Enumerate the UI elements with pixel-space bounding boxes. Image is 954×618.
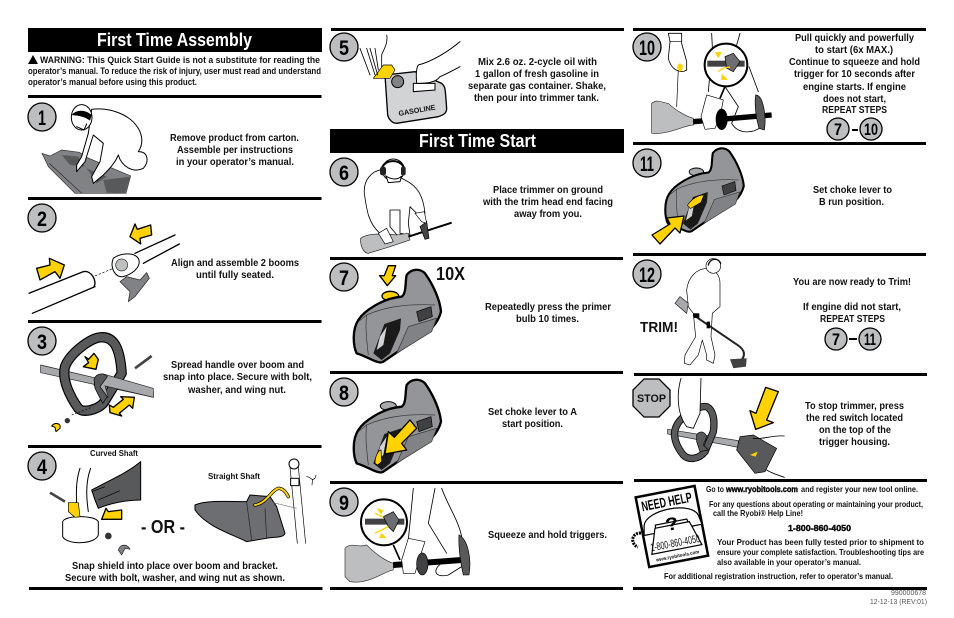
step 10 text bbox=[789, 33, 920, 116]
step 4 number: 4 bbox=[37, 456, 47, 479]
step 1 text: in your operator’s manual. bbox=[176, 157, 294, 168]
step 12 text bbox=[793, 277, 911, 325]
heading: first time assembly: First Time Assembly bbox=[97, 30, 252, 50]
step 10 number: 10 bbox=[639, 37, 655, 60]
arrow: press primer bbox=[380, 266, 396, 286]
help text block bbox=[664, 484, 924, 581]
panel: first time start column bbox=[330, 28, 624, 590]
icon: curved shaft shield bbox=[50, 462, 141, 555]
step 6 number: 6 bbox=[339, 162, 349, 185]
step 11 number: 11 bbox=[640, 153, 654, 176]
icon: phone cord bbox=[633, 533, 641, 547]
help text block: www.ryobitools.com bbox=[725, 484, 798, 494]
step 5 text bbox=[468, 57, 606, 104]
or separator: - OR - bbox=[141, 517, 185, 537]
arrow: choke lever down bbox=[385, 420, 417, 454]
repeat steps 7 to 11 bbox=[825, 328, 881, 350]
icon: stop sign: STOP bbox=[637, 393, 666, 405]
step 10 number bbox=[633, 33, 661, 61]
step 11 text bbox=[813, 185, 892, 208]
step 3 text: snap into place. Secure with bolt, bbox=[163, 372, 312, 383]
icon: need help phone card: www.ryobitools.com bbox=[655, 549, 700, 564]
step 10 text: Continue to squeeze and hold bbox=[789, 57, 920, 68]
step 3 text: Spread handle over boom and bbox=[171, 360, 304, 371]
step 11 text: Set choke lever to bbox=[813, 185, 892, 196]
repeat steps 7 to 10: 10 bbox=[864, 121, 878, 139]
icon: need help phone card: NEED HELP bbox=[640, 489, 693, 514]
step 9 text: Squeeze and hold triggers. bbox=[488, 530, 607, 541]
repeat steps 7 to 10: 7 bbox=[834, 121, 842, 139]
step 8 number bbox=[330, 378, 358, 406]
step 6 number bbox=[330, 158, 358, 186]
step 7 text: bulb 10 times. bbox=[516, 314, 579, 325]
step 12 text: If engine did not start, bbox=[803, 302, 901, 313]
step 4 text: Secure with bolt, washer, and wing nut as shown. bbox=[65, 573, 285, 584]
step 12 text: You are now ready to Trim! bbox=[793, 277, 911, 288]
step 5 text: separate gas container. Shake, bbox=[468, 81, 606, 92]
icon: engine housing primer bulb bbox=[354, 266, 441, 362]
step 5 number bbox=[330, 33, 358, 61]
step 1 number: 1 bbox=[38, 107, 46, 130]
step 12 number: 12 bbox=[639, 264, 655, 287]
warning text: operator’s manual before using this product. bbox=[28, 77, 197, 87]
help text block: 1-800-860-4050 bbox=[788, 523, 851, 533]
arrow: press stop switch bbox=[750, 387, 778, 429]
help text block: also available in your operator’s manual. bbox=[717, 557, 861, 567]
step 2 text bbox=[171, 258, 299, 281]
arrow: snap shield bbox=[102, 508, 122, 519]
repeat steps 7 to 10 bbox=[827, 118, 882, 140]
icon: straight shaft shield bbox=[195, 459, 316, 543]
step 8 text: start position. bbox=[502, 419, 563, 430]
step 7 text bbox=[485, 302, 611, 325]
step 4 text bbox=[65, 561, 285, 584]
document number bbox=[870, 590, 927, 606]
icon: need help phone card bbox=[636, 486, 708, 567]
step 11 number bbox=[633, 149, 661, 177]
label: trim: TRIM! bbox=[640, 319, 678, 336]
step 11 text: B run position. bbox=[819, 197, 884, 208]
heading: first time start: First Time Start bbox=[419, 131, 536, 151]
step 6 text: away from you. bbox=[514, 209, 582, 220]
step stop text bbox=[805, 401, 904, 448]
step 8 text bbox=[488, 407, 577, 430]
document number: 990000678 bbox=[891, 590, 926, 597]
icon: gas container with hand: GASOLINE bbox=[398, 103, 436, 118]
icon: need help phone card: 1-800-860-4050 bbox=[650, 533, 701, 554]
help text block: call the Ryobi® Help Line! bbox=[713, 508, 803, 518]
step 5 text: Mix 2.6 oz. 2-cycle oil with bbox=[478, 57, 597, 68]
help text block: Go to bbox=[706, 484, 724, 494]
icon: engine housing choke run bbox=[665, 148, 744, 232]
step 4 number bbox=[28, 452, 56, 480]
arrow: push boom left bbox=[130, 224, 152, 244]
panel: first time assembly column bbox=[28, 28, 322, 590]
icon: stop switch on trimmer bbox=[668, 378, 784, 477]
step 10 text: does not start, bbox=[823, 94, 886, 105]
help text block: Your Product has been fully tested prior to shipment to bbox=[717, 537, 924, 547]
icon: person trimming bbox=[675, 259, 747, 368]
icon: person unpacking carton bbox=[42, 105, 147, 193]
step 2 number: 2 bbox=[37, 208, 47, 231]
heading: first time start bbox=[330, 129, 624, 153]
panel: start and stop column bbox=[633, 28, 927, 606]
step 10 text: to start (6x MAX.) bbox=[815, 45, 893, 56]
label: straight shaft: Straight Shaft bbox=[208, 471, 260, 481]
arrow: choke lever right bbox=[652, 216, 684, 244]
icon: pull starter bbox=[652, 33, 772, 134]
icon: need help phone card: ? bbox=[664, 513, 680, 535]
step 2 number bbox=[28, 204, 56, 232]
icon: stop sign bbox=[633, 379, 670, 417]
step 3 number: 3 bbox=[37, 331, 47, 354]
step 6 text bbox=[482, 185, 613, 220]
label: 10x: 10X bbox=[436, 264, 465, 284]
step 7 number: 7 bbox=[339, 267, 349, 290]
step 2 text: until fully seated. bbox=[196, 270, 274, 281]
step 5 text: 1 gallon of fresh gasoline in bbox=[475, 69, 599, 80]
step stop text: on the top of the bbox=[819, 425, 891, 436]
icon: person placing trimmer bbox=[361, 159, 452, 253]
arrow: push boom right bbox=[37, 258, 64, 280]
step 7 text: Repeatedly press the primer bbox=[485, 302, 611, 313]
help text block: ensure your complete satisfaction. Troubleshooting tips are bbox=[717, 547, 924, 557]
step stop text: the red switch located bbox=[806, 413, 903, 424]
step 4 text: Snap shield into place over boom and bracket. bbox=[72, 561, 278, 572]
step 10 text: trigger for 10 seconds after bbox=[794, 69, 915, 80]
step 6 text: with the trim head end facing bbox=[482, 197, 613, 208]
step 1 text: Assemble per instructions bbox=[177, 145, 293, 156]
step 1 text bbox=[170, 133, 299, 168]
step 3 text: washer, and wing nut. bbox=[187, 385, 286, 396]
step 7 number bbox=[330, 263, 358, 291]
arrow: double spread bbox=[109, 397, 134, 416]
repeat steps 7 to 11: 7 bbox=[832, 331, 840, 349]
step 5 number: 5 bbox=[339, 37, 349, 60]
step 1 number bbox=[28, 103, 56, 131]
heading: first time assembly bbox=[28, 28, 322, 52]
step stop text: To stop trimmer, press bbox=[805, 401, 904, 412]
help text block: For additional registration instruction, refer to operator’s manual. bbox=[664, 571, 893, 581]
repeat steps 7 to 11: 11 bbox=[864, 331, 876, 349]
warning text: WARNING: This Quick Start Guide is not a substitute for reading the bbox=[40, 55, 320, 65]
step stop text: trigger housing. bbox=[819, 437, 890, 448]
step 12 text: REPEAT STEPS bbox=[820, 314, 885, 325]
step 9 number: 9 bbox=[339, 492, 349, 515]
step 6 text: Place trimmer on ground bbox=[493, 185, 603, 196]
warning text bbox=[28, 55, 321, 87]
step 12 number bbox=[633, 260, 661, 288]
icon: squeeze triggers bbox=[345, 488, 470, 582]
step 10 text: Pull quickly and powerfully bbox=[795, 33, 914, 44]
arrow: spread handle bbox=[83, 353, 98, 369]
warning text: operator’s manual. To reduce the risk of injury, user must read and understand bbox=[28, 66, 321, 76]
step 10 text: REPEAT STEPS bbox=[822, 105, 887, 116]
icon: gas container with hand bbox=[360, 35, 460, 123]
step 8 number: 8 bbox=[339, 382, 349, 405]
step 9 number bbox=[330, 488, 358, 516]
icon: engine housing choke start bbox=[354, 380, 441, 472]
step 8 text: Set choke lever to A bbox=[488, 407, 577, 418]
step 3 number bbox=[28, 327, 56, 355]
icon: handle over boom bbox=[41, 337, 153, 432]
step 1 text: Remove product from carton. bbox=[170, 133, 299, 144]
icon: align two booms bbox=[29, 224, 179, 313]
help text block: and register your new tool online. bbox=[801, 484, 918, 494]
label: curved shaft: Curved Shaft bbox=[90, 448, 138, 458]
step 5 text: then pour into trimmer tank. bbox=[474, 93, 599, 104]
document number: 12-12-13 (REV:01) bbox=[870, 599, 927, 606]
step 3 text bbox=[163, 360, 312, 396]
step 2 text: Align and assemble 2 booms bbox=[171, 258, 299, 269]
step 10 text: engine starts. If engine bbox=[803, 82, 906, 93]
